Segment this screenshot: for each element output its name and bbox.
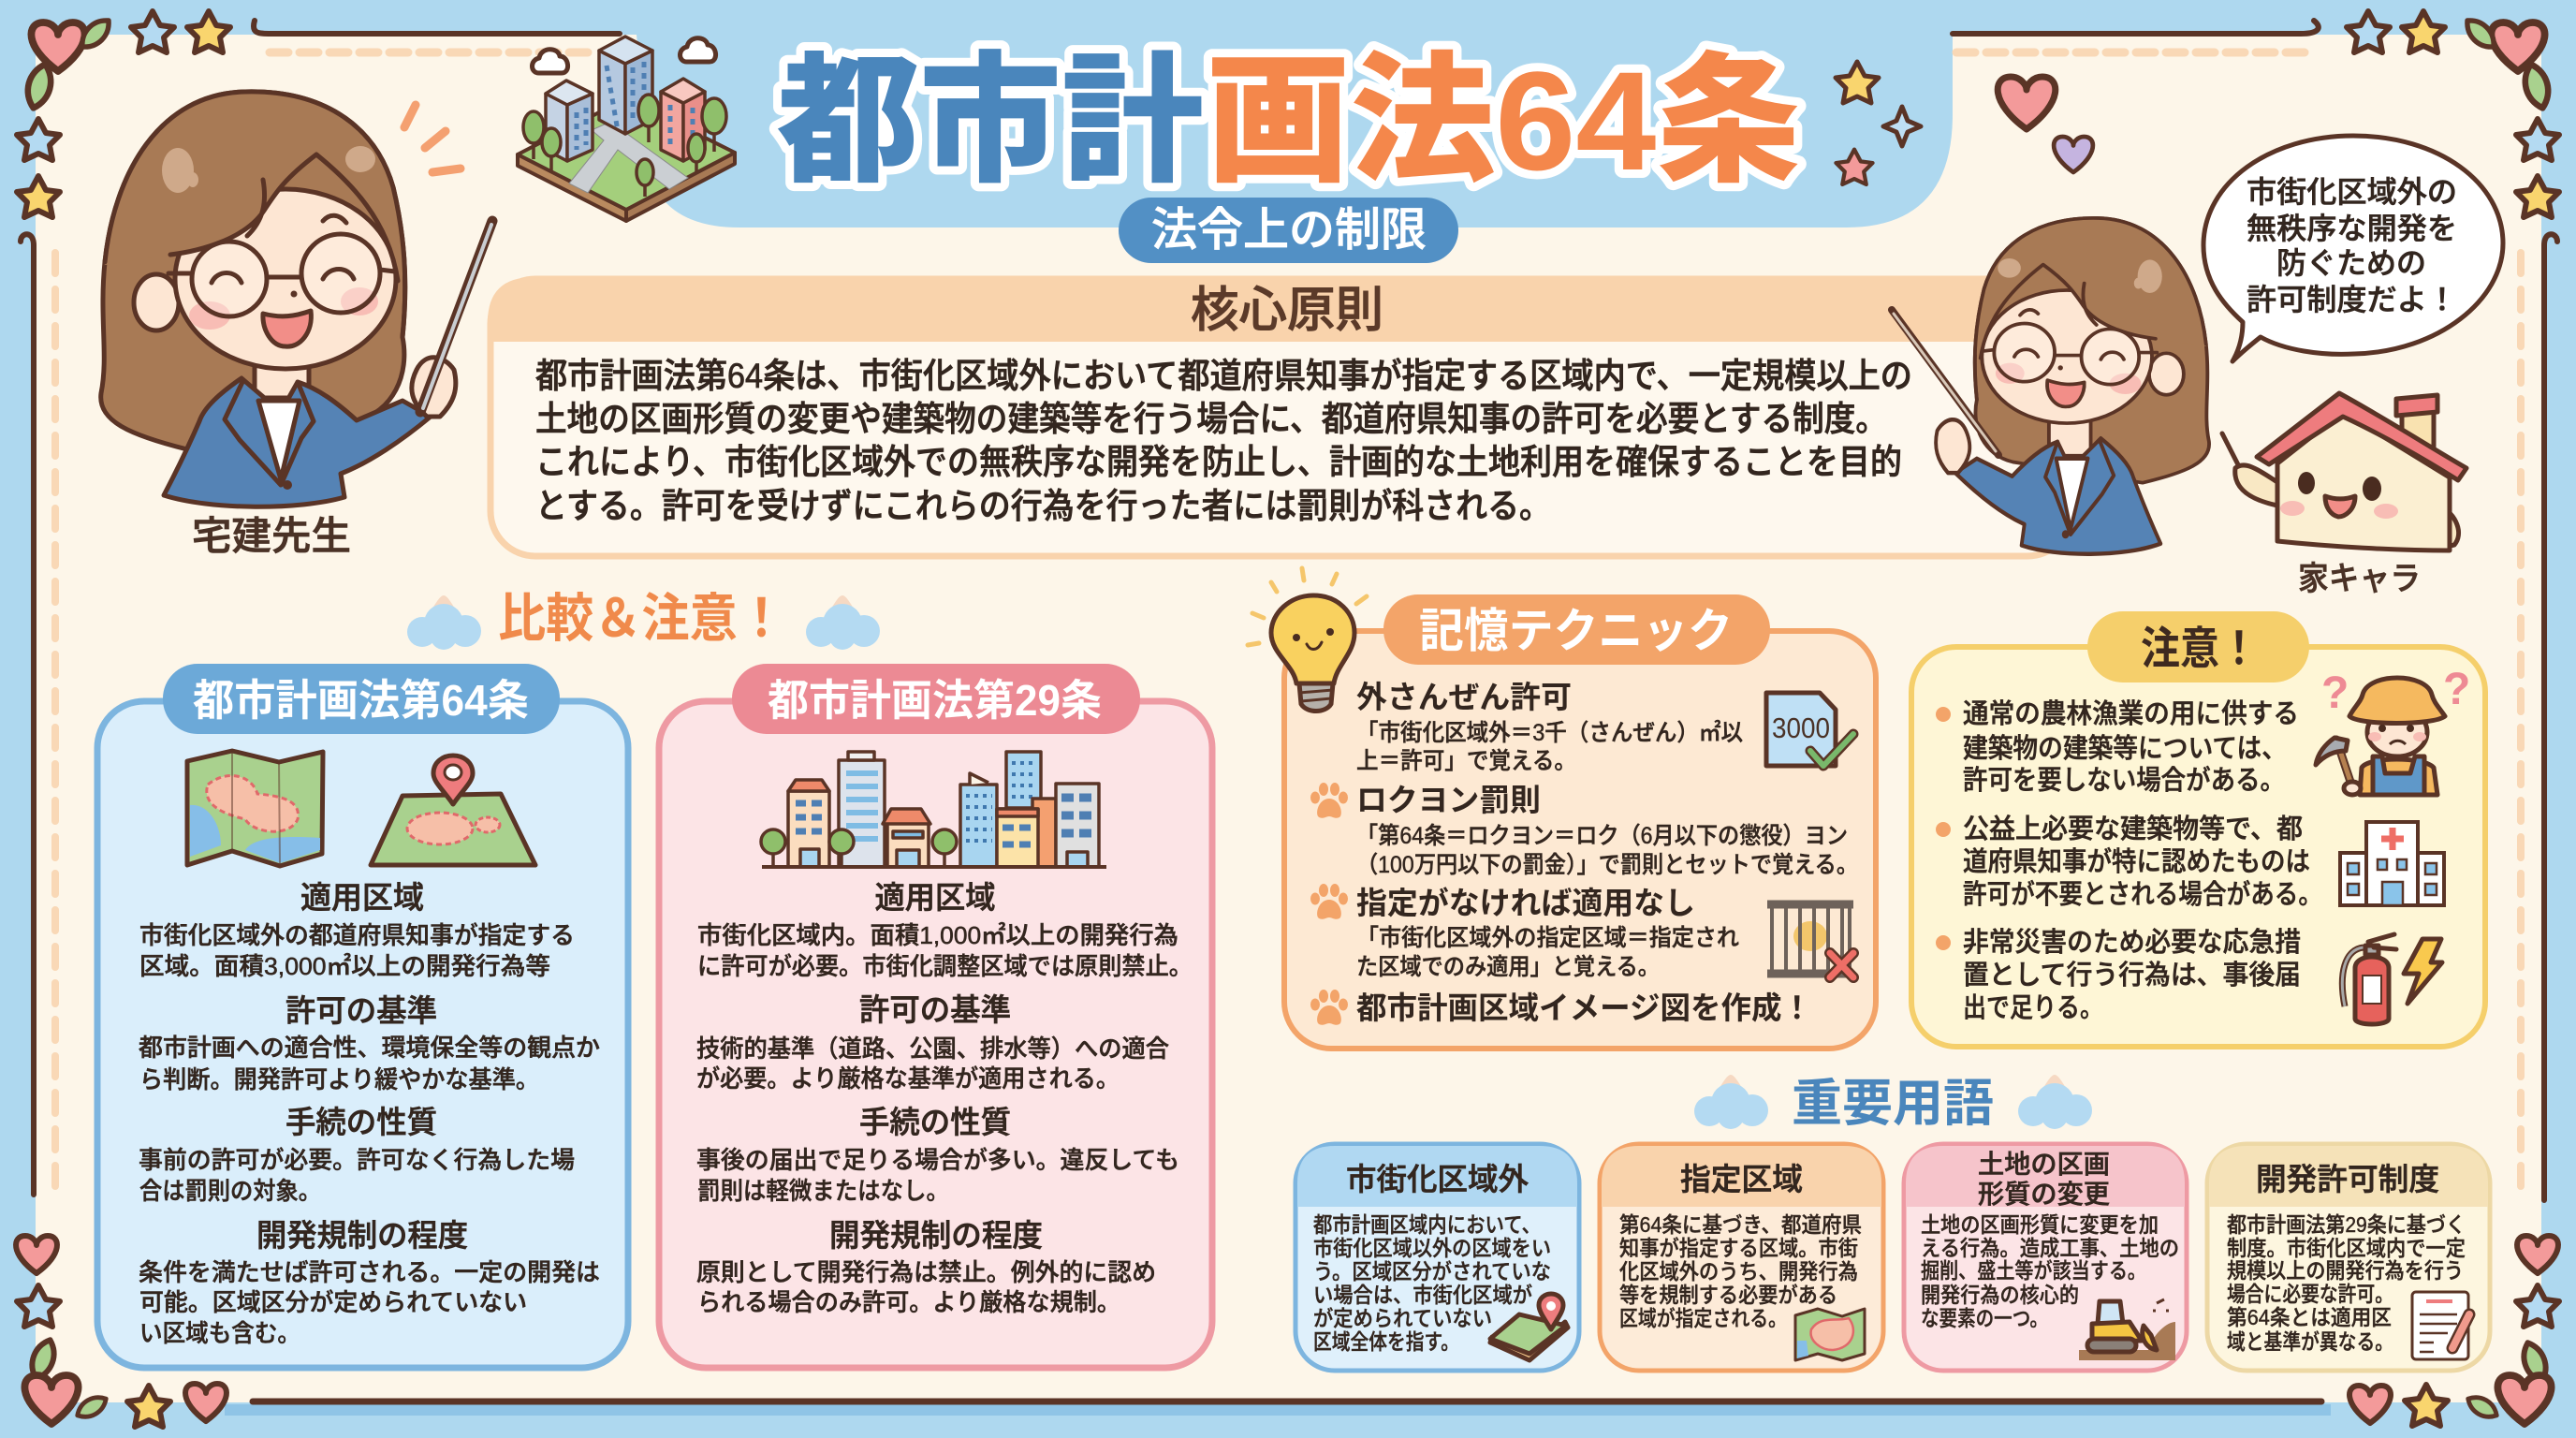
- term card: outside urbanization area: [1295, 1144, 1579, 1371]
- caution item 3: 出で足りる。: [1963, 992, 2103, 1023]
- panel: memory techniques: [1248, 568, 1876, 1049]
- icon: isometric city: [518, 37, 735, 221]
- icon: zoned land with pin: [371, 756, 535, 865]
- term card: development permit system: 都市計画法第29条に基づく: [2227, 1212, 2466, 1237]
- speech bubble: 無秩序な開発を: [2247, 212, 2457, 245]
- term card: outside urbanization area: 都市計画区域内において、: [1313, 1212, 1541, 1237]
- row: procedure: 手続の性質: [285, 1105, 437, 1139]
- term card: designated area: 化区域外のうち、開発行為: [1619, 1259, 1858, 1284]
- row: degree of regulation: 条件を満たせば許可される。一定の開発は: [139, 1258, 600, 1286]
- section heading: key terms: 重要用語: [1792, 1076, 1994, 1132]
- subtitle pill: [1119, 198, 1458, 263]
- tip 3: 「市街化区域外の指定区域＝指定され: [1356, 925, 1739, 951]
- row: procedure: 手続の性質: [859, 1105, 1011, 1139]
- row: permit criteria: 許可の基準: [285, 993, 437, 1028]
- pointer: [420, 221, 492, 412]
- caution item 3: [1936, 927, 2301, 1023]
- icon: bulldozer: [2079, 1299, 2175, 1360]
- tip 3: た区域でのみ適用」と覚える。: [1356, 954, 1660, 980]
- character: left teacher: [94, 84, 492, 558]
- term card: designated area: 区域が指定される。: [1619, 1306, 1787, 1330]
- term card: designated area: 知事が指定する区域。市街: [1619, 1236, 1858, 1260]
- corner decorations: bottom right: [2349, 1236, 2559, 1426]
- corner decorations: top right: [2347, 11, 2559, 217]
- row: degree of regulation: 開発規制の程度: [256, 1218, 468, 1253]
- row: applicable area: [697, 880, 1193, 980]
- row: degree of regulation: い区域も含む。: [139, 1319, 300, 1347]
- corner decorations: top left: [17, 11, 230, 217]
- section heading: compare: 比較＆注意！: [498, 589, 785, 648]
- term card: outside urbanization area: が定められていない: [1313, 1306, 1492, 1330]
- row: permit criteria: 技術的基準（道路、公園、排水等）への適合: [696, 1034, 1169, 1063]
- term card: development permit system: 場合に必要な許可。: [2227, 1282, 2393, 1306]
- header blue tab: [637, 0, 1953, 227]
- panel: article 29: [659, 664, 1212, 1368]
- row: procedure: [696, 1105, 1179, 1205]
- row: procedure: 罰則は軽微またはなし。: [697, 1177, 949, 1205]
- term card: change of land form: える行為。造成工事、土地の: [1921, 1236, 2179, 1260]
- term card: outside urbanization area: う。区域区分がされていな: [1313, 1259, 1551, 1284]
- row: applicable area: 区域。面積3,000㎡以上の開発行為等: [139, 952, 550, 980]
- subtitle pill: 法令上の制限: [1151, 205, 1427, 256]
- row: degree of regulation: 原則として開発行為は禁止。例外的に認め: [696, 1258, 1156, 1286]
- character: right teacher: [1892, 213, 2215, 554]
- title: 画法64条: [1206, 42, 1801, 199]
- label: house: 家キャラ: [2298, 561, 2421, 597]
- icon: 3000 document: [1766, 693, 1853, 766]
- icon: folded map: [187, 751, 323, 866]
- icon: map: [1795, 1309, 1865, 1360]
- term card: development permit system: 域と基準が異なる。: [2227, 1329, 2393, 1354]
- caution item 2: 公益上必要な建築物等で、都: [1963, 814, 2303, 844]
- core principle text: [535, 357, 1912, 525]
- speech bubble: [2203, 136, 2503, 361]
- row: permit criteria: 許可の基準: [859, 992, 1011, 1027]
- row: degree of regulation: られる場合のみ許可。より厳格な規制。: [697, 1288, 1120, 1316]
- term card: development permit system: 制度。市街化区域内で一定: [2227, 1236, 2466, 1260]
- term card: development permit system: 規模以上の開発行為を行う: [2227, 1258, 2464, 1283]
- tip 1: [1356, 680, 1743, 774]
- caution item 1: 許可を要しない場合がある。: [1963, 765, 2285, 796]
- caution item 1: [1936, 698, 2299, 796]
- term card: outside urbanization area: 市街化区域外: [1346, 1162, 1529, 1196]
- icon: farmer: [2316, 665, 2470, 795]
- icon: light bulb: [1248, 568, 1367, 712]
- tip 3: 指定がなければ適用なし: [1356, 886, 1695, 920]
- caution item 1: 建築物の建築等については、: [1963, 733, 2287, 764]
- icon: farmer: ?: [2321, 668, 2349, 718]
- row: applicable area: に許可が必要。市街化調整区域では原則禁止。: [697, 952, 1193, 980]
- icon: extinguisher and lightning: [2342, 934, 2442, 1024]
- pill: article 64: 都市計画法第64条: [193, 676, 529, 725]
- term card: change of land form: [1904, 1144, 2187, 1371]
- pill: article 29: 都市計画法第29条: [768, 676, 1102, 725]
- term card: change of land form: 土地の区画: [1978, 1150, 2110, 1179]
- term card: outside urbanization area: い場合は、市街化区域が: [1313, 1283, 1532, 1307]
- term card: designated area: [1600, 1144, 1883, 1371]
- icon: permit document and pen: [2412, 1292, 2469, 1359]
- core principle text: 土地の区画形質の変更や建築物の建築等を行う場合に、都道府県知事の許可を必要とする制度。: [535, 400, 1887, 438]
- tip 2: [1310, 783, 1858, 878]
- term card: designated area: 指定区域: [1680, 1162, 1803, 1196]
- tip 2: （100万円以下の罰金）」で罰則とセットで覚える。: [1356, 852, 1858, 878]
- speech bubble: 許可制度だよ！: [2247, 283, 2457, 316]
- tip 1: 「市街化区域外＝3千（さんぜん）㎡以: [1356, 720, 1743, 746]
- pill: memory techniques: [1383, 594, 1770, 665]
- decorations around title: [1836, 62, 2093, 184]
- pill: memory techniques: 記憶テクニック: [1419, 605, 1733, 657]
- pointer: [1892, 310, 1998, 455]
- accent marks: [404, 105, 461, 172]
- row: permit criteria: ら判断。開発許可より緩やかな基準。: [139, 1065, 539, 1093]
- icon: cage with cross: [1767, 904, 1853, 977]
- pill: article 64: [163, 664, 560, 734]
- pill: article 29: [732, 664, 1140, 734]
- icon: farmer: ?: [2443, 665, 2470, 714]
- section heading: key terms: [1694, 1075, 2092, 1132]
- character: house: [2222, 393, 2466, 597]
- speech bubble: 防ぐための: [2276, 246, 2426, 280]
- speech bubble: 市街化区域外の: [2247, 175, 2457, 209]
- term card: designated area: 等を規制する必要がある: [1619, 1283, 1837, 1307]
- row: applicable area: 適用区域: [874, 880, 996, 915]
- term card: change of land form: 形質の変更: [1978, 1180, 2110, 1209]
- icon: 3000 document: 3000: [1772, 712, 1830, 744]
- panel: core principle: [488, 277, 2072, 556]
- caution item 3: 非常災害のため必要な応急措: [1963, 927, 2301, 958]
- pill: caution: [2087, 611, 2309, 682]
- row: procedure: 事後の届出で足りる場合が多い。違反しても: [696, 1146, 1179, 1174]
- caution item 2: 許可が不要とされる場合がある。: [1963, 879, 2322, 910]
- term card: outside urbanization area: 区域全体を指す。: [1313, 1329, 1459, 1354]
- caution item 2: [1936, 814, 2322, 910]
- row: applicable area: [139, 880, 575, 980]
- row: degree of regulation: 開発規制の程度: [829, 1218, 1043, 1253]
- row: permit criteria: [139, 993, 600, 1093]
- heading: core principle: 核心原則: [1191, 284, 1383, 338]
- panel: caution: [1911, 611, 2485, 1047]
- core principle text: 都市計画法第64条は、市街化区域外において都道府県知事が指定する区域内で、一定規模以上の: [535, 357, 1912, 395]
- term card: designated area: 第64条に基づき、都道府県: [1619, 1212, 1862, 1237]
- panel: article 64: [97, 664, 628, 1368]
- row: applicable area: 適用区域: [300, 880, 424, 915]
- row: permit criteria: [696, 992, 1169, 1093]
- title: 都市計: [777, 42, 1204, 199]
- caution item 2: 道府県知事が特に認めたものは: [1963, 846, 2310, 877]
- icon: land and pin: [1490, 1294, 1568, 1360]
- corner decorations: bottom left: [16, 1236, 227, 1427]
- title: [777, 42, 1801, 199]
- pill: caution: 注意！: [2141, 624, 2259, 674]
- tip 4: 都市計画区域イメージ図を作成！: [1356, 990, 1812, 1025]
- row: permit criteria: 都市計画への適合性、環境保全等の観点か: [139, 1034, 600, 1062]
- term card: development permit system: 第64条とは適用区: [2227, 1305, 2392, 1329]
- caution item 3: 置として行う行為は、事後届: [1963, 960, 2301, 990]
- term card: change of land form: 土地の区画形質に変更を加: [1921, 1212, 2159, 1237]
- tip 1: 外さんぜん許可: [1356, 680, 1572, 714]
- row: applicable area: 市街化区域外の都道府県知事が指定する: [139, 921, 575, 949]
- tip 2: ロクヨン罰則: [1356, 783, 1541, 817]
- row: permit criteria: が必要。より厳格な基準が適用される。: [696, 1064, 1120, 1093]
- row: procedure: 合は罰則の対象。: [139, 1177, 321, 1205]
- row: degree of regulation: [139, 1218, 600, 1347]
- row: degree of regulation: 可能。区域区分が定められていない: [139, 1288, 527, 1316]
- bottom blue band: [225, 1404, 2331, 1416]
- term card: change of land form: 開発行為の核心的: [1921, 1283, 2079, 1307]
- row: applicable area: 市街化区域内。面積1,000㎡以上の開発行為: [697, 921, 1178, 949]
- section heading: compare: [407, 589, 880, 650]
- term card: development permit system: [2207, 1144, 2490, 1371]
- term card: change of land form: な要素の一つ。: [1921, 1306, 2048, 1330]
- icon: city skyline: [761, 752, 1106, 867]
- tip 2: 「第64条＝ロクヨン＝ロク（6月以下の懲役）ヨン: [1356, 823, 1848, 849]
- row: procedure: 事前の許可が必要。許可なく行為した場: [139, 1146, 575, 1174]
- caution item 1: 通常の農林漁業の用に供する: [1963, 698, 2299, 729]
- core principle text: とする。許可を受けずにこれらの行為を行った者には罰則が科される。: [535, 487, 1551, 525]
- row: degree of regulation: [696, 1218, 1156, 1316]
- tip 1: 上＝許可」で覚える。: [1356, 748, 1576, 774]
- icon: hospital: [2340, 822, 2444, 905]
- row: procedure: [139, 1105, 575, 1205]
- label: teacher: 宅建先生: [192, 514, 351, 558]
- term card: change of land form: 掘削、盛土等が該当する。: [1921, 1258, 2146, 1283]
- term card: outside urbanization area: 市街化区域以外の区域をい: [1313, 1236, 1551, 1260]
- core principle text: これにより、市街化区域外での無秩序な開発を防止し、計画的な土地利用を確保することを目的: [535, 443, 1902, 481]
- term card: development permit system: 開発許可制度: [2256, 1162, 2439, 1196]
- tip 3: [1310, 884, 1739, 980]
